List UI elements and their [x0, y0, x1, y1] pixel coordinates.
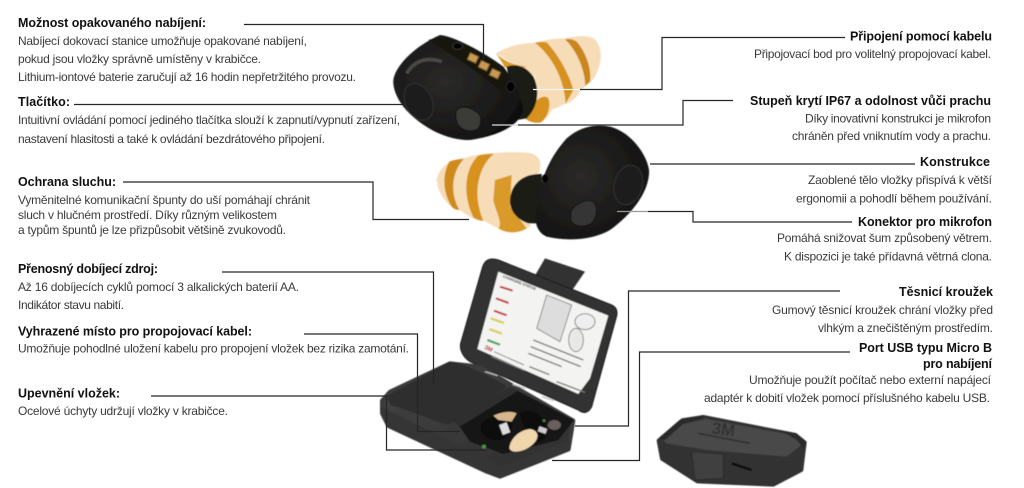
- line: cable connection, white part: [533, 88, 580, 90]
- text: sealing ring: [772, 285, 993, 335]
- line: cable connection: [580, 38, 845, 90]
- text: usb port: [704, 341, 993, 405]
- text: sealing ring: vlhkým a znečištěným prostředím.: [818, 321, 993, 335]
- text: construction: ergonomii a pohodlí během používání.: [796, 192, 992, 206]
- text: IP67: Díky inovativní konstrukci je mikrofon: [805, 112, 991, 126]
- text: button: Tlačítko:: [18, 95, 70, 109]
- text: usb port: adaptér k dobití vložek pomocí příslušného kabelu USB.: [704, 391, 990, 405]
- text: cable storage: Vyhrazené místo pro propojovací kabel:: [18, 324, 252, 338]
- text: IP67: Stupeň krytí IP67 a odolnost vůči prachu: [750, 94, 991, 108]
- text: cable connection: Připojovací bod pro volitelný propojovací kabel.: [754, 47, 991, 61]
- text: mic connector: Pomáhá snižovat šum způsobený větrem.: [777, 231, 992, 245]
- open charging case: [381, 258, 617, 478]
- 3M disc: [398, 79, 439, 125]
- line: sealing ring: [575, 291, 840, 426]
- text: construction: [796, 155, 993, 206]
- body lower: [535, 125, 649, 239]
- text: IP67: [750, 94, 991, 143]
- text: construction: Zaoblené tělo vložky přispívá k větší: [808, 173, 993, 187]
- text: cable storage: [18, 324, 409, 356]
- text: cable connection: Připojení pomocí kabelu: [850, 30, 992, 44]
- text: fixing: Upevnění vložek:: [18, 386, 120, 400]
- line: IP67, pale part: [492, 124, 518, 126]
- text: hearing protection: sluch v hlučném prostředí. Díky různým velikostem: [18, 208, 277, 222]
- text: IP67: chráněn před vniknutím vody a prachu.: [792, 129, 991, 143]
- earbud: top, with charging contacts: [393, 35, 601, 140]
- instruction card: [477, 272, 608, 394]
- text: mic connector: [777, 215, 992, 264]
- text: button: Intuitivní ovládání pomocí jediného tlačítka slouží k zapnutí/vypnutí zařízení,: [18, 113, 400, 127]
- text: fixing: Ocelové úchyty udržují vložky v krabičce.: [18, 404, 228, 418]
- charging contacts: [467, 53, 501, 79]
- hinges: [485, 372, 554, 401]
- text: recharge: Možnost opakovaného nabíjení:: [18, 16, 206, 30]
- battery compartment cover: [388, 363, 505, 423]
- line: IP67: [518, 100, 733, 125]
- text: portable charger: [18, 262, 299, 312]
- text: portable charger: Přenosný dobíjecí zdroj:: [18, 262, 158, 276]
- line: construction: [650, 163, 915, 165]
- line: mic connector, pale part: [617, 210, 648, 212]
- text: portable charger: Až 16 dobíjecích cyklů pomocí 3 alkalických baterií AA.: [18, 280, 299, 294]
- line: portable charger: [222, 272, 434, 384]
- line: mic connector: [648, 212, 852, 222]
- line: recharge: [244, 24, 484, 60]
- ear tip top: [496, 36, 601, 123]
- text: portable charger: Indikátor stavu nabití.: [18, 298, 124, 312]
- line: button: [74, 104, 405, 106]
- ear tip lower: [437, 152, 545, 232]
- text: recharge: Lithium-iontové baterie zaručují až 16 hodin nepřetržitého provozu.: [18, 70, 356, 84]
- line: usb port: [552, 352, 850, 460]
- lid frame: [460, 259, 617, 412]
- latch: [533, 258, 585, 293]
- text: hearing protection: [18, 175, 311, 237]
- text: construction: Konstrukce: [920, 155, 990, 169]
- button lower: [571, 201, 597, 226]
- text: mic connector: K dispozici je také přídavná větrná clona.: [784, 250, 992, 264]
- line: fixing: [151, 396, 485, 450]
- line: cable storage: [304, 334, 460, 432]
- text: mic connector: Konektor pro mikrofon: [858, 215, 992, 229]
- line: hearing protection: [123, 182, 469, 220]
- tray: [382, 363, 573, 477]
- body top: [393, 35, 523, 140]
- text: recharge: pokud jsou vložky správně umístěny v krabičce.: [18, 52, 261, 66]
- instruction card: CHARGING STATUS: [502, 275, 537, 291]
- text: sealing ring: Gumový těsnicí kroužek chrání vložky před: [772, 303, 993, 317]
- text: recharge: [18, 16, 356, 84]
- text: cable connection: [754, 30, 992, 61]
- closed case: [658, 415, 807, 485]
- text: hearing protection: a typům špuntů je lze přizpůsobit většině zvukovodů.: [18, 223, 286, 237]
- 3M logo: 3M: [711, 419, 736, 441]
- text: sealing ring: Těsnicí kroužek: [899, 285, 993, 299]
- text: cable storage: Umožňuje pohodlné uložení kabelu pro propojení vložek bez rizika zamotání.: [18, 342, 409, 356]
- text: usb port: Port USB typu Micro B: [859, 341, 992, 355]
- text: recharge: Nabíjecí dokovací stanice umožňuje opakované nabíjení,: [18, 34, 307, 48]
- text: fixing: [18, 386, 228, 418]
- text: hearing protection: Vyměnitelné komunikační špunty do uší pomáhají chránit: [18, 193, 311, 207]
- text: usb port: Umožňuje použít počítač nebo externí napájecí: [749, 373, 992, 387]
- text: button: nastavení hlasitosti a také k ovládání bezdrátového připojení.: [18, 132, 325, 146]
- earbud: lower: [437, 125, 649, 239]
- 3M disc lower: [610, 162, 647, 208]
- text: button: [18, 95, 400, 146]
- text: usb port: pro nabíjení: [923, 357, 993, 371]
- text: hearing protection: Ochrana sluchu:: [18, 175, 116, 189]
- leader lines: [74, 24, 915, 460]
- earbud compartment: [452, 387, 574, 454]
- instruction card: 3M: [483, 345, 493, 354]
- button: [456, 107, 481, 131]
